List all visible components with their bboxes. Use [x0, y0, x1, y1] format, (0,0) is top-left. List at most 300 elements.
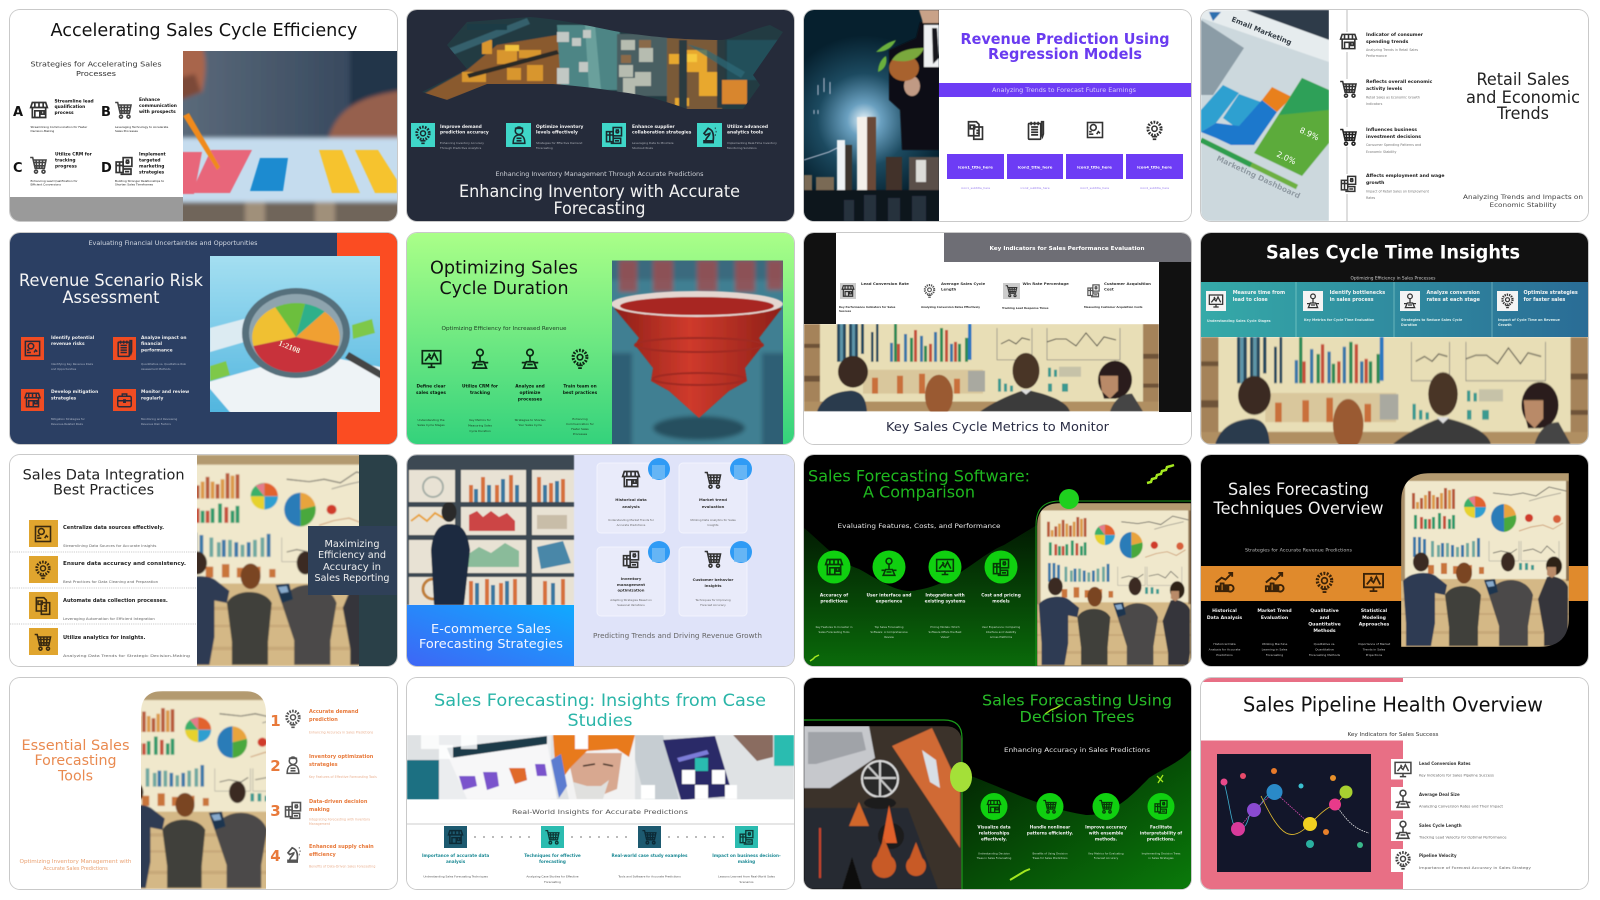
subtitle: Optimizing Efficiency for Increased Revenue [442, 326, 567, 332]
title: Sales Forecasting [1228, 480, 1369, 500]
subtitle: Enhancing Accuracy in Sales Predictions [1004, 746, 1150, 754]
card titles: optimization [618, 588, 645, 592]
item 2: Inventory optimization [309, 754, 374, 760]
row 4: Pipeline Velocity [1419, 852, 1457, 858]
item subtitles [417, 416, 595, 436]
row 2 [29, 556, 186, 584]
item titles: Facilitate [1150, 824, 1172, 829]
item titles [416, 383, 598, 402]
item titles: Impact on business decision- [712, 852, 781, 858]
timeline item 2: Indicators [1366, 102, 1383, 106]
item A: Decision-Making [30, 129, 54, 133]
item subtitles: Enhancing [572, 416, 588, 420]
row 1: Lead Conversion Rates [1419, 760, 1471, 766]
title [434, 690, 766, 730]
item 2: financial [141, 340, 163, 346]
item 2: Analyze impact on [141, 334, 186, 340]
item subtitles: Monitoring Solutions [727, 146, 757, 150]
item 2: Assessment Methods [141, 366, 171, 370]
photo: team viewing charts [1036, 501, 1191, 666]
item titles: collaboration strategies [632, 130, 692, 136]
item subtitles: Through Predictive Analytics [439, 146, 482, 150]
card subtitles: Understanding Market Trends for [608, 518, 655, 522]
item titles: Train team on [563, 383, 597, 389]
icon tile 1 [411, 123, 435, 147]
item subtitles: Duration [1401, 322, 1418, 326]
timeline item 3: Influences business [1366, 127, 1417, 133]
teal band [1201, 282, 1588, 336]
item subtitles: Learning in Sales [1262, 648, 1288, 652]
item titles [977, 824, 1182, 841]
item subtitles: Analysis for Accurate [1209, 648, 1240, 652]
item 4: Cost [1104, 286, 1114, 291]
title: Techniques Overview [1213, 499, 1384, 519]
item titles: experience [876, 598, 902, 604]
squiggle accents [810, 465, 1174, 661]
item subtitles: in Sales Strategies [1148, 856, 1174, 860]
item 2: Quantitative vs. Qualitative Risk [141, 362, 187, 366]
row 4: Importance of Forecast Accuracy in Sales Strategy [1419, 866, 1532, 870]
row 4 [1391, 848, 1532, 872]
item 3: Tracking Lead Response Times [1002, 306, 1049, 310]
item B: Sales Processes [115, 129, 138, 133]
item subtitles: Predictions [1216, 653, 1233, 657]
photo: man facing chart wall [407, 455, 574, 605]
timeline item 4: growth [1366, 180, 1384, 186]
item 3: Develop mitigation [51, 388, 98, 394]
title: Sales Cycle Time Insights [1266, 242, 1520, 263]
panel: Sales Forecasting: Insights from Case Studies [407, 678, 794, 888]
row 4: Analyzing Data Trends for Strategic Decision-Making [63, 653, 191, 658]
item 2: Average Sales Cycle [941, 280, 985, 286]
title [982, 691, 1172, 726]
subtitle: Enhancing Inventory Management Through Accurate Predictions [496, 171, 704, 178]
item titles: predictions. [1147, 836, 1176, 841]
item subtitles: Trends in Sales [1362, 648, 1386, 652]
title [23, 468, 185, 498]
item titles [1233, 290, 1578, 302]
item subtitles: User Experience: Comparing [982, 625, 1021, 629]
photo: desk with laptop and cones [804, 720, 962, 888]
title [808, 466, 1030, 502]
subtitle: Evaluating Features, Costs, and Performance [838, 523, 1001, 530]
item titles: interpretability of [1140, 830, 1182, 835]
icons row [968, 122, 1161, 139]
subtitles row: icon3_subtitle_here [1080, 186, 1109, 190]
item subtitles [439, 141, 777, 150]
card subtitles: Accurate Predictions [617, 523, 646, 527]
subtitle: Optimizing Efficiency in Sales Processes [1350, 275, 1436, 280]
row 3: Leveraging Automation for Efficient Integration [63, 616, 155, 621]
timeline item 1: spending trends [1366, 39, 1409, 45]
item 4: Revenue Risk Factors [141, 422, 171, 426]
photo: email marketing dashboard: Email Marketing [1230, 15, 1293, 47]
subtitle: Real-World Insights for Accurate Predictions [512, 808, 689, 816]
item titles: prediction accuracy [440, 130, 489, 136]
item subtitles: Forecast Accuracy [1094, 856, 1119, 860]
item titles: methods. [1095, 836, 1117, 841]
row 3: Sales Cycle Length [1419, 822, 1462, 828]
timeline item 3: investment decisions [1366, 134, 1421, 140]
panel: Sales Forecasting Software: A Comparison [804, 455, 1191, 666]
title: Sales Forecasting: Insights from Case [434, 690, 766, 710]
item subtitles: Understanding the [418, 418, 445, 422]
subtitle: Processes [76, 69, 116, 78]
subtitles row: icon1_subtitle_here [961, 186, 990, 190]
title buttons [947, 154, 1183, 179]
card titles: Customer behavior [693, 577, 733, 582]
item subtitles: Faster Sales [571, 426, 589, 430]
row 2: Analyzing Conversion Rates and Their Impact [1419, 804, 1504, 808]
title: Accelerating Sales Cycle Efficiency [50, 21, 358, 41]
row 2: Best Practices for Data Cleaning and Preparation [63, 579, 159, 584]
subtitle: Strategies for Accelerating Sales [30, 60, 162, 68]
card titles: evaluation [702, 504, 725, 509]
photo: team viewing charts [197, 455, 359, 666]
item 1: revenue risks [51, 340, 85, 346]
item 3: 3 [270, 802, 281, 820]
title [22, 738, 130, 784]
item 1: Key Performance Indicators for Sales [839, 304, 896, 308]
title: Enhancing Inventory with Accurate [459, 182, 740, 201]
item titles: Techniques for effective [524, 852, 581, 858]
row 1: Streamlining Data Sources for Accurate Insights [63, 543, 156, 548]
item 2: performance [141, 347, 173, 353]
overlay text box [308, 526, 397, 595]
item titles: User interface and [867, 592, 911, 598]
title block: Forecasting Strategies [419, 636, 563, 651]
panel: Key Sales Cycle Metrics to Monitor [804, 232, 1191, 444]
item 2: Analyzing Conversion Rates Effectively [921, 304, 980, 308]
item D: targeted [139, 158, 161, 164]
item titles: Accuracy of [820, 592, 848, 598]
timeline item 4: Affects employment and wage [1366, 173, 1445, 179]
item C [13, 152, 93, 186]
item titles: Evaluation [1261, 615, 1288, 621]
item titles: Importance of accurate data [422, 852, 489, 858]
photo: businessman and coin towers [804, 10, 939, 221]
item 4: Customer Acquisition [1104, 280, 1151, 286]
item subtitles: Sales Cycle Stages [417, 422, 445, 426]
item 2: 2 [270, 756, 281, 774]
item titles [440, 124, 768, 136]
item titles [1207, 608, 1390, 634]
item A: Streamline lead [54, 98, 94, 104]
timeline line [1346, 10, 1348, 221]
icon circles [980, 792, 1174, 820]
subtitle: Predicting Trends and Driving Revenue Growth [593, 632, 762, 640]
item subtitles: Forecasting [536, 146, 553, 150]
item titles: Analyze and [515, 383, 545, 389]
overlay text box: Efficiency and [318, 550, 386, 561]
item 4 [270, 844, 375, 868]
item titles: Modeling [1362, 615, 1386, 621]
subtitles row [961, 186, 1169, 190]
glass cards [597, 463, 747, 616]
item B: with prospects [139, 109, 176, 115]
item subtitles [816, 625, 1021, 639]
title: A Comparison [863, 482, 975, 502]
item 4: efficiency [309, 852, 337, 858]
timeline item 3 [1337, 127, 1421, 154]
item D [101, 152, 166, 186]
item subtitles: Strategies for Effective Demand [536, 141, 583, 145]
item 2 [113, 334, 187, 370]
item titles: forecasting [539, 858, 566, 864]
photo: warehouse ribbon [422, 17, 783, 109]
item 3: Revenue-Related Risks [51, 422, 83, 426]
card titles: Inventory [621, 576, 642, 581]
item 1: Identifying Key Revenue Risks [51, 362, 94, 366]
item subtitles: Your Sales Cycle [518, 422, 542, 426]
item titles: processes [518, 396, 543, 402]
timeline item 1: Indicator of consumer [1366, 32, 1424, 38]
item subtitles: Interface and Usability [986, 630, 1017, 634]
item 1: Lead Conversion Rate [861, 280, 909, 286]
subtitle: Key Indicators for Sales Success [1348, 732, 1439, 738]
squiggle accents [1010, 704, 1163, 880]
title [960, 30, 1170, 63]
photo: magnifier over risk wheel: 1:2108 [277, 338, 302, 355]
panel: Essential Sales Forecasting Tools [10, 678, 397, 888]
title: Revenue Scenario Risk [19, 270, 203, 290]
item C: C [13, 161, 23, 176]
item subtitles: Qualitative vs. [1314, 642, 1335, 646]
panel: Sales Forecasting Techniques Overview [1201, 455, 1588, 666]
icon tile 4 [697, 123, 722, 147]
title block [407, 605, 574, 666]
item subtitles: Review [884, 635, 895, 639]
card subtitles: Techniques for Improving [694, 598, 731, 602]
item titles: patterns efficiently. [1027, 830, 1074, 835]
item titles: Integration with [925, 592, 965, 598]
row 2 [1391, 786, 1504, 810]
item titles: relationships [979, 830, 1010, 835]
timeline item 3: Economic Stability [1366, 150, 1397, 154]
title: Trends [1496, 104, 1549, 124]
item C: Efficient Conversions [30, 182, 61, 186]
item titles: sales stages [416, 390, 446, 396]
card titles: insights [704, 583, 722, 588]
timeline item 3: Consumer Spending Patterns and [1366, 143, 1421, 147]
overlay text box: Sales Reporting [314, 573, 390, 584]
panel: Enhancing Inventory with Accurate Forecasting [407, 10, 794, 221]
item subtitles: Forecasting [544, 880, 561, 884]
icon tiles [1206, 290, 1518, 310]
title: Optimizing Sales [430, 257, 578, 278]
title: Sales Data Integration [23, 468, 185, 484]
item A: A [13, 105, 23, 120]
item subtitles: Importance of Market [1358, 642, 1391, 646]
timeline item 4: Rates [1366, 196, 1376, 200]
card titles: Market trend [699, 497, 727, 502]
photo: team viewing charts [1201, 336, 1588, 450]
subtitle: Optimizing Inventory Management with [20, 858, 132, 864]
item subtitles [976, 851, 1181, 860]
item subtitles: Software: A Comprehensive [870, 630, 908, 634]
row 3 [1391, 818, 1507, 840]
photo: email marketing dashboard: 8.9% [1298, 126, 1321, 143]
row 4 [29, 628, 191, 658]
title [459, 182, 740, 218]
icons on band [1216, 573, 1383, 592]
item subtitles [1209, 642, 1391, 657]
row 1 [29, 520, 164, 548]
item titles: analytics tools [727, 130, 763, 136]
item 2 [921, 280, 985, 308]
icons [623, 472, 720, 567]
item B [101, 97, 177, 133]
timeline item 2 [1337, 79, 1433, 106]
item 3 [21, 388, 98, 426]
title: Key Sales Cycle Metrics to Monitor [886, 418, 1110, 434]
item subtitles: Forecasting [1266, 653, 1283, 657]
title: Essential Sales [22, 738, 130, 754]
timeline item 4: Impact of Retail Sales on Employment [1366, 190, 1430, 194]
row 1: Centralize data sources effectively. [63, 525, 164, 531]
item 4 [1084, 280, 1151, 308]
item D: D [101, 161, 112, 176]
title: Sales Forecasting Using [982, 691, 1172, 709]
row 1: Key Indicators for Sales Pipeline Success [1419, 773, 1494, 777]
item titles: Historical [1212, 608, 1237, 614]
item 3: Win Rate Percentage [1022, 280, 1069, 286]
item subtitles: Sales Forecasting Tools [818, 630, 850, 634]
row 2: Ensure data accuracy and consistency. [63, 561, 186, 567]
panel: Optimizing Sales Cycle Duration [407, 232, 794, 444]
item subtitles: Understanding Sales Forecasting Techniques [423, 874, 488, 878]
title [1466, 70, 1580, 124]
item titles: making [738, 858, 755, 864]
item titles: Utilize CRM for [462, 383, 499, 389]
item 3 [270, 798, 370, 826]
card subtitles: Forecast Accuracy [700, 603, 726, 607]
row 1 [1391, 758, 1494, 779]
subtitle: Analyzing Trends and Impacts on [1463, 193, 1583, 201]
timeline item 2: Retail Sales as Economic Growth [1366, 96, 1420, 100]
item titles: Identify bottlenecks [1330, 290, 1385, 296]
title: and Economic [1466, 88, 1580, 108]
item titles: Visualize data [977, 824, 1011, 829]
item titles: tracking [470, 390, 490, 396]
item 4: Measuring Customer Acquisition Costs [1084, 304, 1143, 308]
item 4: regularly [141, 395, 164, 401]
photo: collage with portrait and tablet [407, 735, 794, 800]
title [1213, 480, 1384, 519]
item B: Enhance [139, 97, 160, 103]
panel: Retail Sales and Economic Trends [1201, 10, 1588, 221]
icon tile 3 [602, 123, 626, 147]
item 1: prediction [309, 716, 338, 722]
item subtitles: Quantitative [1315, 648, 1334, 652]
item 4: Benefits of Data-Driven Sales Forecasting [309, 864, 375, 868]
panel: Sales Forecasting Using Decision Trees [804, 678, 1191, 888]
item titles: Real-world case study examples [611, 852, 688, 858]
title buttons: icon2_title_here [1018, 164, 1053, 170]
title: Best Practices [53, 482, 154, 498]
row 4: Utilize analytics for insights. [63, 635, 145, 641]
item A: process [54, 110, 74, 116]
item titles: Utilize advanced [727, 124, 768, 130]
item titles: Quantitative [1308, 622, 1341, 628]
title: Sales Pipeline Health Overview [1243, 692, 1543, 716]
item subtitles: Tools and Software for Accurate Predictions [617, 874, 681, 878]
item A: qualification [54, 104, 85, 110]
item titles: lead to close [1233, 296, 1268, 302]
item titles [820, 592, 1021, 604]
panel: Revenue Scenario Risk Assessment [10, 232, 397, 444]
overlay text box: Maximizing [324, 539, 380, 550]
item 1 [270, 708, 374, 734]
item subtitles: Understanding Sales Cycle Stages [1207, 318, 1271, 322]
item titles: Optimize strategies [1524, 290, 1578, 296]
photo: email marketing dashboard: 2.0% [1275, 150, 1298, 167]
item subtitles: Enhancing Inventory Accuracy [440, 141, 484, 145]
item 2: Key Features of Effective Forecasting Tools [309, 774, 377, 778]
item subtitles: Implementing Decision Trees [1142, 851, 1181, 855]
photo: pen on bar chart [183, 51, 397, 221]
item 1 [21, 334, 95, 370]
title: Regression Models [988, 45, 1142, 63]
item subtitles: Projections [1366, 653, 1383, 657]
item 1: Accurate demand [309, 708, 359, 714]
title: Studies [568, 710, 633, 730]
subtitle: Economic Stability [1490, 201, 1557, 209]
item 1: Identify potential [51, 334, 95, 340]
overlay text box: Accuracy in [323, 562, 381, 573]
subtitles row: icon4_subtitle_here [1140, 186, 1169, 190]
item subtitles: Leveraging Data to Minimize [632, 141, 674, 145]
panel: Accelerating Sales Cycle Efficiency [10, 10, 397, 221]
item 2: strategies [309, 762, 338, 768]
card subtitles: Insights [708, 523, 719, 527]
title: Tools [57, 768, 93, 784]
subtitle: Evaluating Financial Uncertainties and Opportunities [88, 240, 258, 246]
item titles: effectively. [981, 836, 1007, 841]
item 3: Data-driven decision [309, 798, 368, 804]
item subtitles: Scenarios [739, 880, 754, 884]
item titles: in sales process [1330, 296, 1374, 302]
subtitle [30, 60, 162, 78]
item 3: strategies [51, 395, 77, 401]
panel: Sales Cycle Time Insights [1201, 232, 1588, 444]
item titles [422, 852, 781, 864]
item subtitles: Understanding Decision [978, 851, 1010, 855]
item titles: Define clear [416, 383, 446, 389]
item titles: Improve demand [440, 124, 482, 130]
header bar: Key Indicators for Sales Performance Evaluation [990, 246, 1145, 252]
item D: Building Stronger Relationships to [115, 179, 164, 183]
title: Forecasting [34, 752, 116, 768]
header bar [944, 232, 1191, 262]
item subtitles: Trees in Sales Forecasting [976, 856, 1012, 860]
timeline tiles [444, 826, 758, 848]
card subtitles: Seasonal Variations [617, 603, 645, 607]
item subtitles: Across Platforms [990, 635, 1013, 639]
item subtitles: Key Metrics for [469, 418, 492, 422]
item C: progress [55, 164, 77, 170]
item 4: Monitor and review [141, 388, 189, 394]
subtitle [1463, 193, 1583, 209]
item subtitles: Implementing Real-Time Inventory [727, 141, 777, 145]
item C: tracking [55, 158, 76, 164]
item subtitles: Forecasting Methods [1309, 653, 1340, 657]
item 1: and Opportunities [51, 366, 77, 370]
item subtitles: Top Sales Forecasting [874, 625, 904, 629]
item subtitles: Pricing Models: Which [930, 625, 960, 629]
item subtitles [423, 874, 775, 884]
item D: strategies [139, 170, 165, 176]
